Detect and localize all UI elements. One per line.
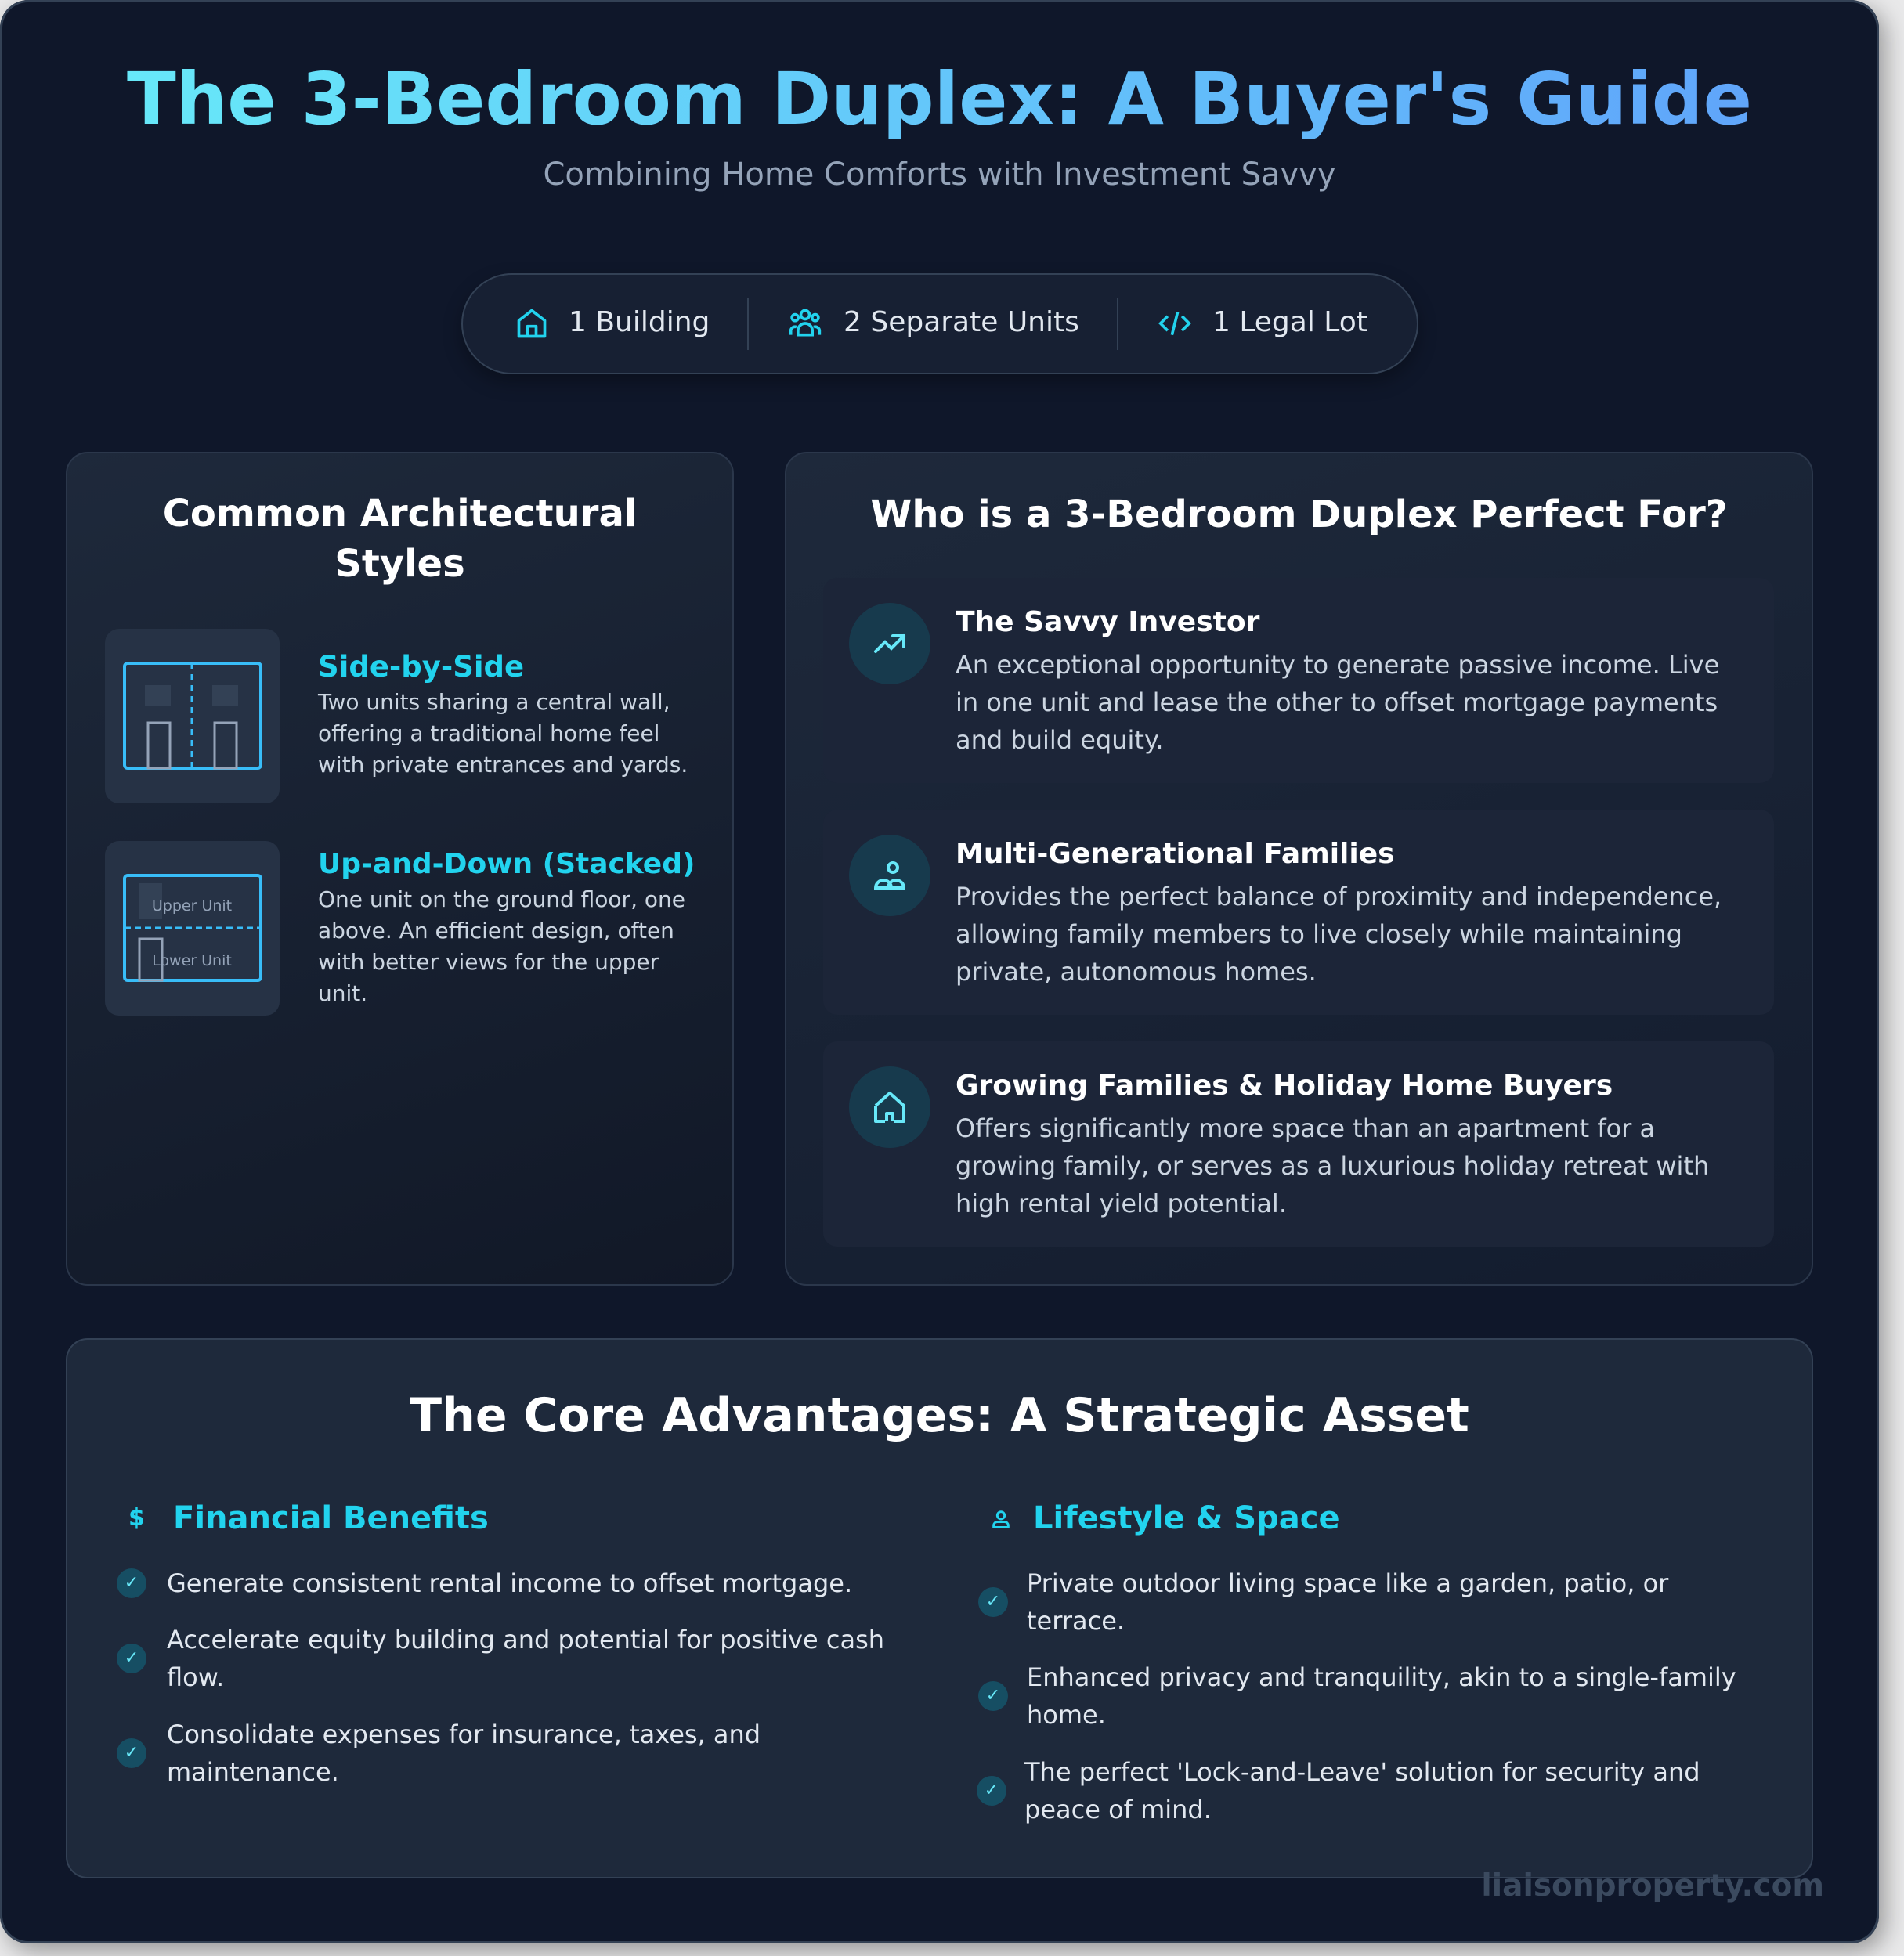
item: ✓ xyxy=(985,1781,999,1800)
style: stacked xyxy=(318,848,695,1006)
column: financial benefits xyxy=(117,1500,884,1787)
style: stacked: with better views for the upper xyxy=(318,949,659,975)
style: side-by-side: with private entrances and yards. xyxy=(318,752,688,778)
column: lifestyle & space: peace of mind. xyxy=(1024,1795,1212,1824)
item: ✓ xyxy=(125,1743,139,1763)
column: lifestyle & space: The perfect 'Lock-and-Leave' solution for security and xyxy=(1024,1757,1700,1787)
item xyxy=(117,1568,146,1598)
column: lifestyle & space: Enhanced privacy and tranquility, akin to a single-family xyxy=(1027,1662,1736,1692)
column: financial benefits: flow. xyxy=(167,1662,224,1692)
stat: 2 Separate Units: 2 Separate Units xyxy=(844,306,1079,338)
card: savvy investor: in one unit and lease the other to offset mortgage payments xyxy=(956,687,1718,717)
style: side-by-side: Two units sharing a central wall, xyxy=(318,689,670,715)
icon: code brackets xyxy=(1158,312,1191,335)
column: financial benefits: Generate consistent rental income to offset mortgage. xyxy=(167,1568,852,1598)
style: side-by-side: Side-by-Side xyxy=(318,650,524,684)
card: growing families: high rental yield potential. xyxy=(956,1189,1287,1218)
column: lifestyle & space xyxy=(977,1500,1736,1824)
card: multi-generational: Multi-Generational Families xyxy=(956,838,1395,870)
column: financial benefits: Financial Benefits xyxy=(173,1500,489,1536)
column: financial benefits: Consolidate expenses for insurance, taxes, and xyxy=(167,1720,761,1749)
card: savvy investor xyxy=(823,578,1774,783)
item xyxy=(977,1776,1006,1806)
style: stacked: above. An efficient design, often xyxy=(318,918,674,944)
item xyxy=(117,1644,146,1673)
column: financial benefits: maintenance. xyxy=(167,1757,339,1787)
heading xyxy=(163,492,637,586)
style: stacked: unit. xyxy=(318,980,367,1006)
style: side-by-side: offering a traditional home feel xyxy=(318,720,659,746)
item: ✓ xyxy=(125,1648,139,1668)
item: ✓ xyxy=(986,1686,1000,1705)
icon: stacked: Lower Unit xyxy=(152,952,232,969)
column: lifestyle & space: terrace. xyxy=(1027,1606,1125,1636)
card: growing families: growing family, or serves as a luxurious holiday retreat with xyxy=(956,1151,1709,1181)
subtitle: Combining Home Comforts with Investment Savvy xyxy=(543,157,1336,193)
card: savvy investor: and build equity. xyxy=(956,725,1164,755)
panel: who it's for xyxy=(785,452,1813,1286)
icon: stacked xyxy=(105,841,280,1016)
icon: family xyxy=(849,835,930,916)
card: multi-generational: Provides the perfect balance of proximity and independence, xyxy=(956,882,1722,911)
card: savvy investor: An exceptional opportunity to generate passive income. Live xyxy=(956,650,1719,680)
panel: core advantages xyxy=(66,1338,1813,1878)
icon: trend xyxy=(849,603,930,684)
icon: stacked: Upper Unit xyxy=(152,897,232,915)
icon: house xyxy=(517,309,547,338)
column: lifestyle & space: Lifestyle & Space xyxy=(1033,1500,1340,1536)
item xyxy=(978,1587,1008,1617)
card: growing families: Offers significantly more space than an apartment for a xyxy=(956,1113,1655,1143)
style: side-by-side xyxy=(318,650,688,778)
style: stacked: One unit on the ground floor, one xyxy=(318,886,685,912)
stat: 1 Legal Lot: 1 Legal Lot xyxy=(1212,306,1367,338)
heading: Common Architectural xyxy=(163,492,637,536)
card: growing families: Growing Families & Holiday Home Buyers xyxy=(956,1070,1613,1102)
card: growing families xyxy=(823,1041,1774,1247)
watermark: liaisonproperty.com xyxy=(1481,1868,1824,1904)
item: ✓ xyxy=(125,1573,139,1593)
style: stacked: Up-and-Down (Stacked) xyxy=(318,848,695,880)
heading: Styles xyxy=(334,542,465,586)
panel: architectural styles xyxy=(66,452,734,1286)
icon: people xyxy=(789,309,821,337)
item: ✓ xyxy=(986,1592,1000,1611)
heading: Who is a 3-Bedroom Duplex Perfect For? xyxy=(870,493,1728,536)
card: multi-generational: private, autonomous homes. xyxy=(956,957,1317,987)
column: lifestyle & space: Private outdoor living space like a garden, patio, or xyxy=(1027,1568,1668,1598)
title: The 3-Bedroom Duplex: A Buyer's Guide xyxy=(127,57,1752,141)
column: lifestyle & space: home. xyxy=(1027,1700,1106,1730)
card: multi-generational xyxy=(823,810,1774,1015)
item xyxy=(978,1681,1008,1711)
card: multi-generational: allowing family members to live closely while maintaining xyxy=(956,919,1682,949)
stat: 1 Building: 1 Building xyxy=(569,306,710,338)
heading: The Core Advantages: A Strategic Asset xyxy=(410,1388,1469,1443)
icon: side-by-side xyxy=(105,629,280,803)
column: financial benefits: $ xyxy=(128,1504,145,1532)
stats pill xyxy=(461,273,1418,374)
column: financial benefits: Accelerate equity building and potential for positive cash xyxy=(167,1625,884,1655)
card: savvy investor: The Savvy Investor xyxy=(956,606,1259,638)
item xyxy=(117,1738,146,1768)
icon: home xyxy=(849,1066,930,1148)
